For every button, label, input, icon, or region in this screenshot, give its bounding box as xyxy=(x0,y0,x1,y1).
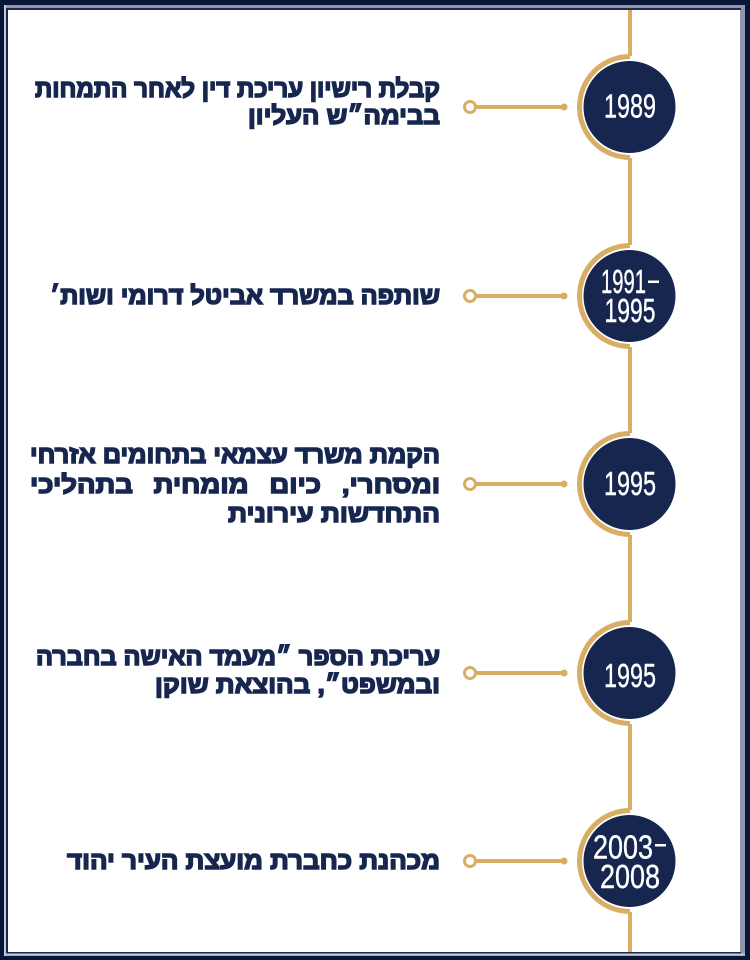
description 1989 xyxy=(35,75,440,130)
connector 1989 xyxy=(464,102,568,112)
milestone 2003-2008 xyxy=(67,810,676,912)
description 1989: בבימה״ש העליון xyxy=(248,102,440,130)
year badge 1995 office: 1995 xyxy=(604,465,656,502)
year badge 1991-1995 xyxy=(580,246,676,346)
connector 1991-1995 xyxy=(464,290,568,302)
connector 1995 office xyxy=(464,478,568,490)
description 1995 office: הקמת משרד עצמאי בתחומים אזרחי xyxy=(30,441,440,469)
description 1995 book xyxy=(36,643,440,699)
year badge 1995 book xyxy=(580,622,676,724)
description 1995 office: ומסחרי, כיום מומחית בתהליכי xyxy=(30,471,440,499)
year badge 1989: 1989 xyxy=(604,88,656,124)
description 1995 book: עריכת הספר ״מעמד האישה בחברה xyxy=(36,643,440,671)
description 2003-2008: מכהנת כחברת מועצת העיר יהוד xyxy=(67,847,440,875)
description 1991-1995: שותפה במשרד אביטל דרומי ושות׳ xyxy=(50,282,440,310)
milestone 1991-1995 xyxy=(50,246,676,346)
milestone 1989 xyxy=(35,56,676,158)
description 1995 office xyxy=(30,441,440,528)
year badge 1991-1995: 1995 xyxy=(604,292,656,329)
year badge 1989 xyxy=(580,56,676,158)
description 1989: קבלת רישיון עריכת דין לאחר התמחות xyxy=(35,75,440,103)
year badge 1991-1995: 1991 xyxy=(601,263,646,300)
year badge 1995 office xyxy=(580,433,676,534)
timeline spine xyxy=(628,10,632,952)
description 1995 office: התחדשות עירונית xyxy=(228,500,440,528)
year badge 1995 book: 1995 xyxy=(604,657,656,694)
description 1995 book: ובמשפט״, בהוצאת שוקן xyxy=(155,671,440,699)
year badge 2003-2008: 2003 xyxy=(593,828,653,866)
year badge 2003-2008 xyxy=(580,810,676,912)
connector 2003-2008 xyxy=(464,856,568,866)
connector 1995 book xyxy=(464,668,568,678)
milestone 1995 book xyxy=(36,622,676,724)
year badge 2003-2008: 2008 xyxy=(600,858,660,895)
milestone 1995 office xyxy=(30,433,676,534)
